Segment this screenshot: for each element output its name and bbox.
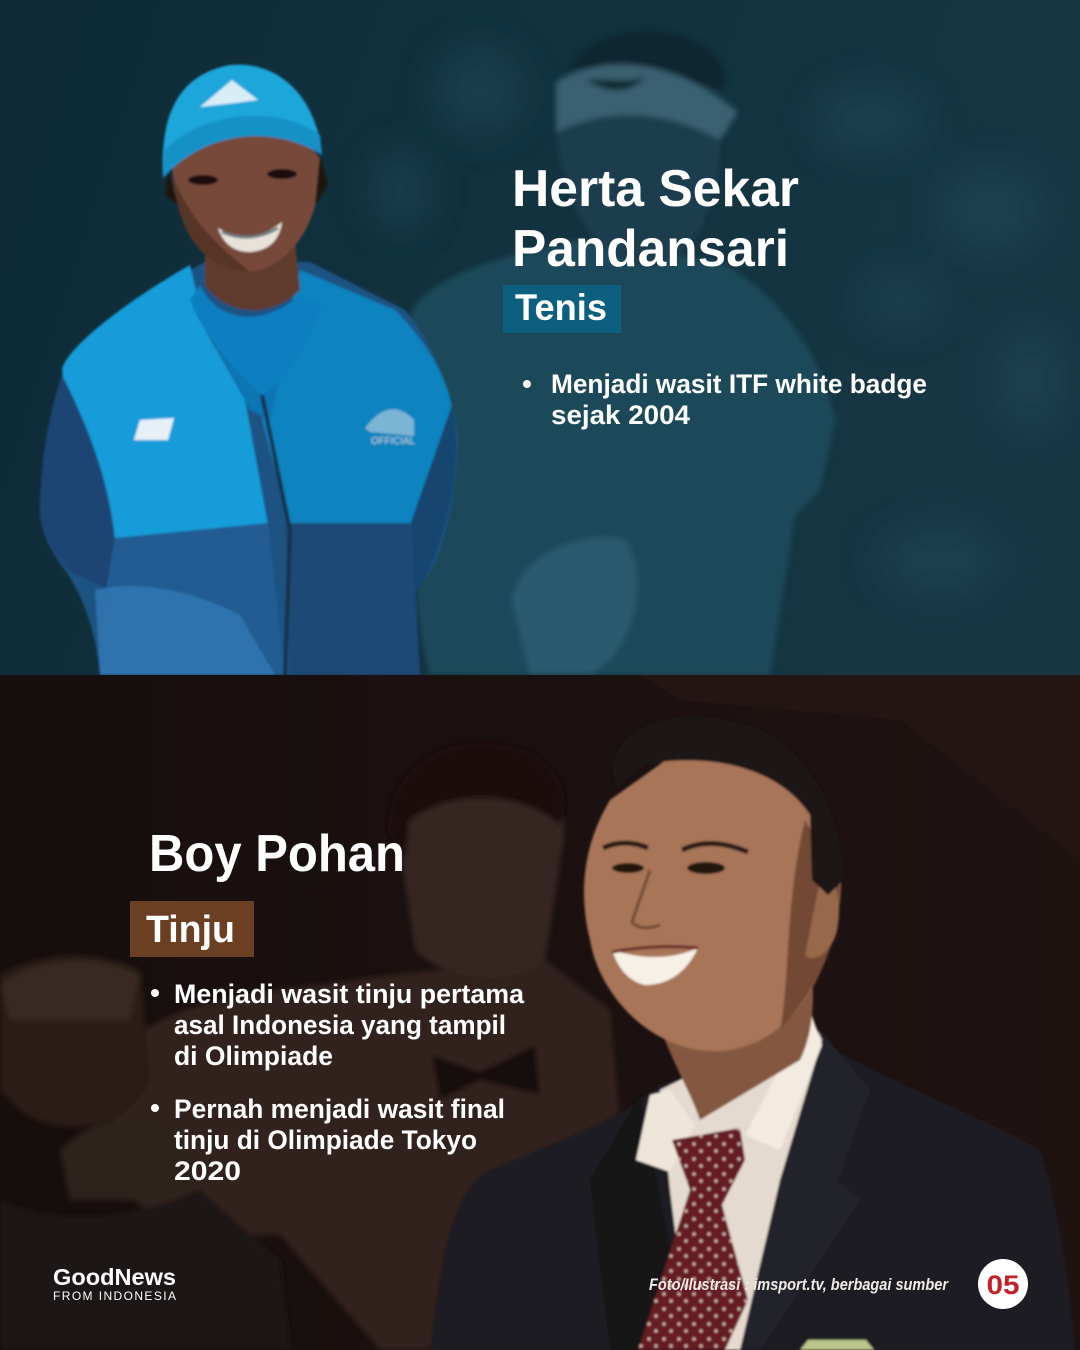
- text: Boy bullets: [151, 979, 525, 1186]
- tag: Tinju: [130, 901, 254, 957]
- tie: [638, 1128, 748, 1350]
- neck: [205, 240, 300, 310]
- logo: GoodNews from Indonesia: GoodNews: [53, 1264, 176, 1290]
- credit: Foto/Ilustrasi : imsport.tv, berbagai sumber: [649, 1276, 949, 1294]
- tag: Tinju: Tinju: [146, 909, 235, 951]
- photo: Herta Sekar Pandansari: OFFICIAL: [371, 436, 415, 447]
- tag: Tenis: [503, 285, 621, 333]
- page number: 05: [986, 1270, 1020, 1300]
- ghost tennis player: [407, 31, 835, 675]
- text: Boy bullets: asal Indonesia yang tampil: [174, 1010, 506, 1040]
- tag: Tenis: Tenis: [515, 287, 607, 328]
- cap: [163, 65, 322, 178]
- heading: Herta Sekar Pandansari: [512, 160, 799, 278]
- logo: GoodNews from Indonesia: FROM INDONESIA: [53, 1289, 176, 1303]
- badge: [800, 1340, 874, 1350]
- text: Boy bullets: Pernah menjadi wasit final: [174, 1094, 505, 1124]
- text: Herta bullet: sejak 2004: [551, 400, 690, 430]
- photo: Herta Sekar Pandansari: [40, 65, 458, 675]
- jacket base: [40, 262, 458, 675]
- face: [172, 134, 320, 272]
- head: [584, 750, 841, 1051]
- text: Boy bullets: di Olimpiade: [174, 1041, 333, 1071]
- photo: Boy Pohan: [430, 716, 1075, 1350]
- panel: bottom boxing background: [0, 743, 1075, 1350]
- logo: GoodNews from Indonesia: [53, 1264, 176, 1303]
- panel: top tennis background: [0, 0, 1080, 675]
- dark sleeves: [40, 375, 115, 590]
- ghost boxing referee and boxer: [0, 795, 620, 1350]
- lower jacket band: [100, 523, 285, 675]
- inner shirt / collar: [211, 338, 278, 419]
- text: Boy bullets: tinju di Olimpiade Tokyo: [174, 1125, 477, 1155]
- text: Boy bullets: Menjadi wasit tinju pertama: [174, 979, 525, 1009]
- hair: [659, 748, 843, 896]
- text: Herta bullet: Menjadi wasit ITF white badge: [551, 369, 927, 399]
- shirt: [660, 1015, 822, 1350]
- jacket upper light blue: [62, 265, 268, 538]
- jacket logos: [134, 418, 174, 440]
- suit: [430, 1035, 1075, 1350]
- text: Boy bullets: 2020: [174, 1156, 241, 1186]
- heading: Boy Pohan: Boy Pohan: [149, 825, 405, 883]
- page number: [978, 1259, 1028, 1309]
- heading: Herta Sekar Pandansari: Herta Sekar: [512, 160, 799, 218]
- heading: Herta Sekar Pandansari: Pandansari: [512, 220, 789, 278]
- neck: [664, 987, 814, 1121]
- text: Herta bullet: [523, 369, 927, 430]
